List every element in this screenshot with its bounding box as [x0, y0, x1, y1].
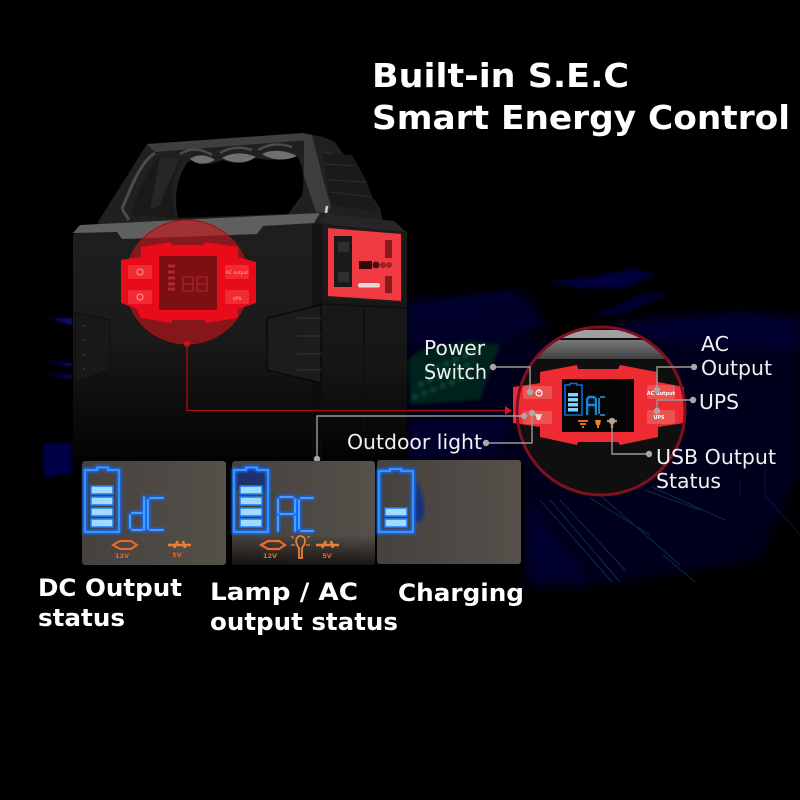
caption: Charging: Charging — [398, 579, 524, 607]
caption: Lamp / AC output status: Lamp / AC — [210, 578, 358, 606]
LCD panel: DC output — [82, 461, 226, 565]
callout: USB Output Status: Status — [656, 469, 721, 493]
caption: DC Output status: DC Output — [38, 574, 182, 602]
LCD panel: lamp and AC output: 5V — [322, 552, 332, 560]
LCD panel: DC output: 5V — [172, 551, 182, 559]
callout: AC Output — [654, 332, 772, 393]
title: Smart Energy Control — [372, 98, 790, 137]
callout: Outdoor light — [347, 410, 535, 454]
callout: Power Switch — [424, 336, 533, 395]
LCD panel: charging — [377, 460, 521, 564]
title: Built-in S.E.C — [372, 56, 629, 95]
callout: AC Output: Output — [701, 356, 772, 380]
caption: DC Output status: status — [38, 604, 125, 632]
callout: Power Switch: Switch — [424, 360, 487, 384]
background circuit board pattern — [43, 268, 800, 585]
red magnifier highlight — [121, 220, 256, 347]
callout: UPS — [654, 390, 739, 414]
product: portable power station — [73, 133, 407, 460]
red control plate — [513, 365, 684, 445]
callout: USB Output Status — [609, 418, 776, 493]
callout: Outdoor light: Outdoor light — [347, 430, 482, 454]
title — [372, 56, 790, 137]
AC socket panel — [327, 227, 402, 302]
LCD panel: lamp and AC output: 12V — [263, 552, 277, 560]
caption: Lamp / AC output status: output status — [210, 608, 398, 636]
handle — [98, 133, 384, 240]
red magnifier highlight: AC output — [226, 270, 248, 276]
caption: DC Output status — [38, 574, 182, 632]
red magnifier highlight: UPS — [233, 296, 242, 302]
red connector line with arrow — [187, 345, 512, 415]
red control plate: UPS — [653, 415, 665, 421]
callout: AC Output: AC — [701, 332, 729, 356]
inset LCD — [562, 379, 634, 432]
body — [73, 213, 407, 460]
callout: UPS: UPS — [699, 390, 739, 414]
LCD panel: DC output: 12V — [115, 552, 129, 560]
caption: Lamp / AC output status — [210, 578, 398, 636]
LCD panel: lamp and AC output — [232, 461, 375, 565]
callout: USB Output Status: USB Output — [656, 445, 776, 469]
red control plate: AC output — [647, 391, 676, 397]
white connector to lamp status — [314, 413, 527, 462]
zoomed control panel inset — [510, 320, 695, 495]
callout: Power Switch: Power — [424, 336, 486, 360]
